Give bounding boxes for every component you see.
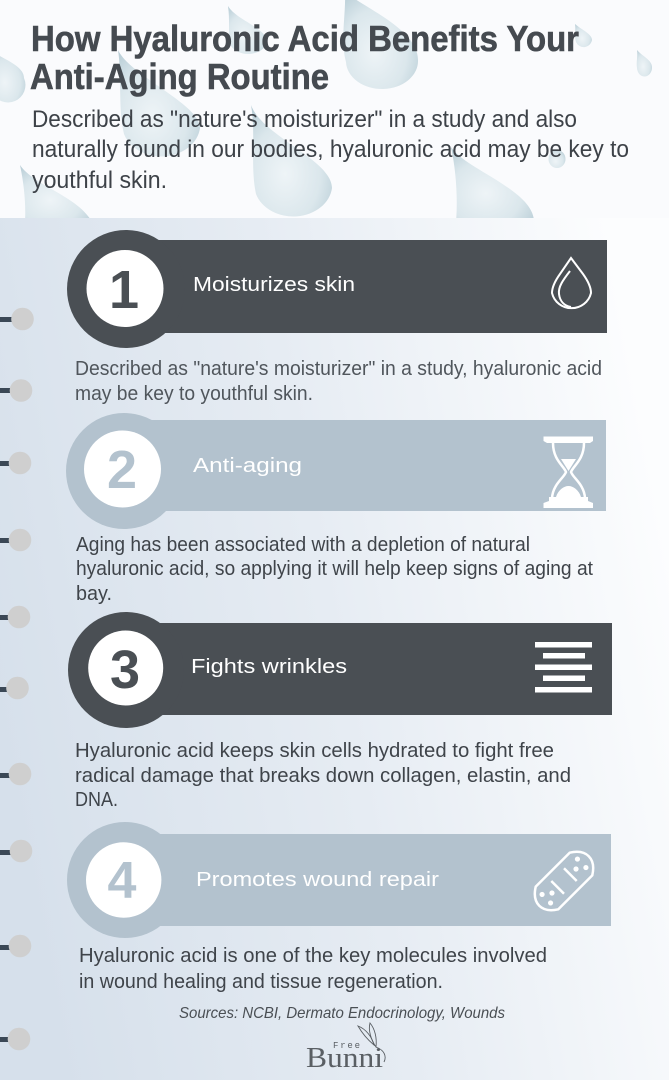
panel: benefit 4 header [67,822,611,938]
intro text [32,106,629,194]
intro text: Described as "nature's moisturizer" in a study and also [32,106,577,133]
panel: benefit 2 header [66,413,606,529]
text: benefit 1: may be key to youthful skin. [75,383,313,405]
title: Anti-Aging Routine [30,56,329,97]
intro text: youthful skin. [32,167,167,194]
number 1: 1 [109,260,139,320]
icon: wrinkle lines [535,642,592,692]
water drops background [0,0,652,222]
text: benefit 1: Described as "nature's moisturizer" in a study, hyaluronic acid [75,358,602,380]
heading: anti-aging: Anti-aging [193,455,302,477]
number 3: 3 [110,640,140,700]
notebook binding dots [0,308,34,1050]
logo: Free Bunni [306,1023,385,1074]
text: benefit 3 [75,740,571,811]
text: benefit 4 [79,945,547,993]
text: benefit 2: hyaluronic acid, so applying it will help keep signs of aging at [76,558,593,580]
sources: Sources: NCBI, Dermato Endocrinology, Wounds [179,1005,505,1022]
text: benefit 1 [75,358,602,405]
text: benefit 3: radical damage that breaks down collagen, elastin, and [75,765,571,787]
icon: bandage [528,845,600,917]
text: benefit 2 [76,534,593,605]
text: benefit 2: Aging has been associated with a depletion of natural [76,534,530,556]
text: benefit 2: bay. [76,583,112,605]
heading: moisturizes skin: Moisturizes skin [193,274,355,296]
intro text: naturally found in our bodies, hyaluronic acid may be key to [32,136,629,163]
panel: benefit 3 header [68,612,612,728]
title: How Hyaluronic Acid Benefits Your [31,18,579,59]
title [30,18,579,97]
heading: fights wrinkles: Fights wrinkles [191,656,347,678]
icon: water drop [552,258,591,308]
text: benefit 3: DNA. [75,789,118,811]
logo: Free Bunni: Bunni [306,1042,383,1074]
panel: benefit 1 header [67,230,607,348]
number 2: 2 [107,440,137,500]
text: benefit 3: Hyaluronic acid keeps skin cells hydrated to fight free [75,740,554,762]
heading: promotes wound repair: Promotes wound repair [196,869,439,891]
icon: hourglass [544,436,593,508]
logo: Free Bunni: Free [333,1041,360,1051]
number 4: 4 [108,852,137,910]
text: benefit 4: Hyaluronic acid is one of the key molecules involved [79,945,547,967]
panel: benefits background [0,218,669,1080]
text: benefit 4: in wound healing and tissue regeneration. [79,971,443,993]
